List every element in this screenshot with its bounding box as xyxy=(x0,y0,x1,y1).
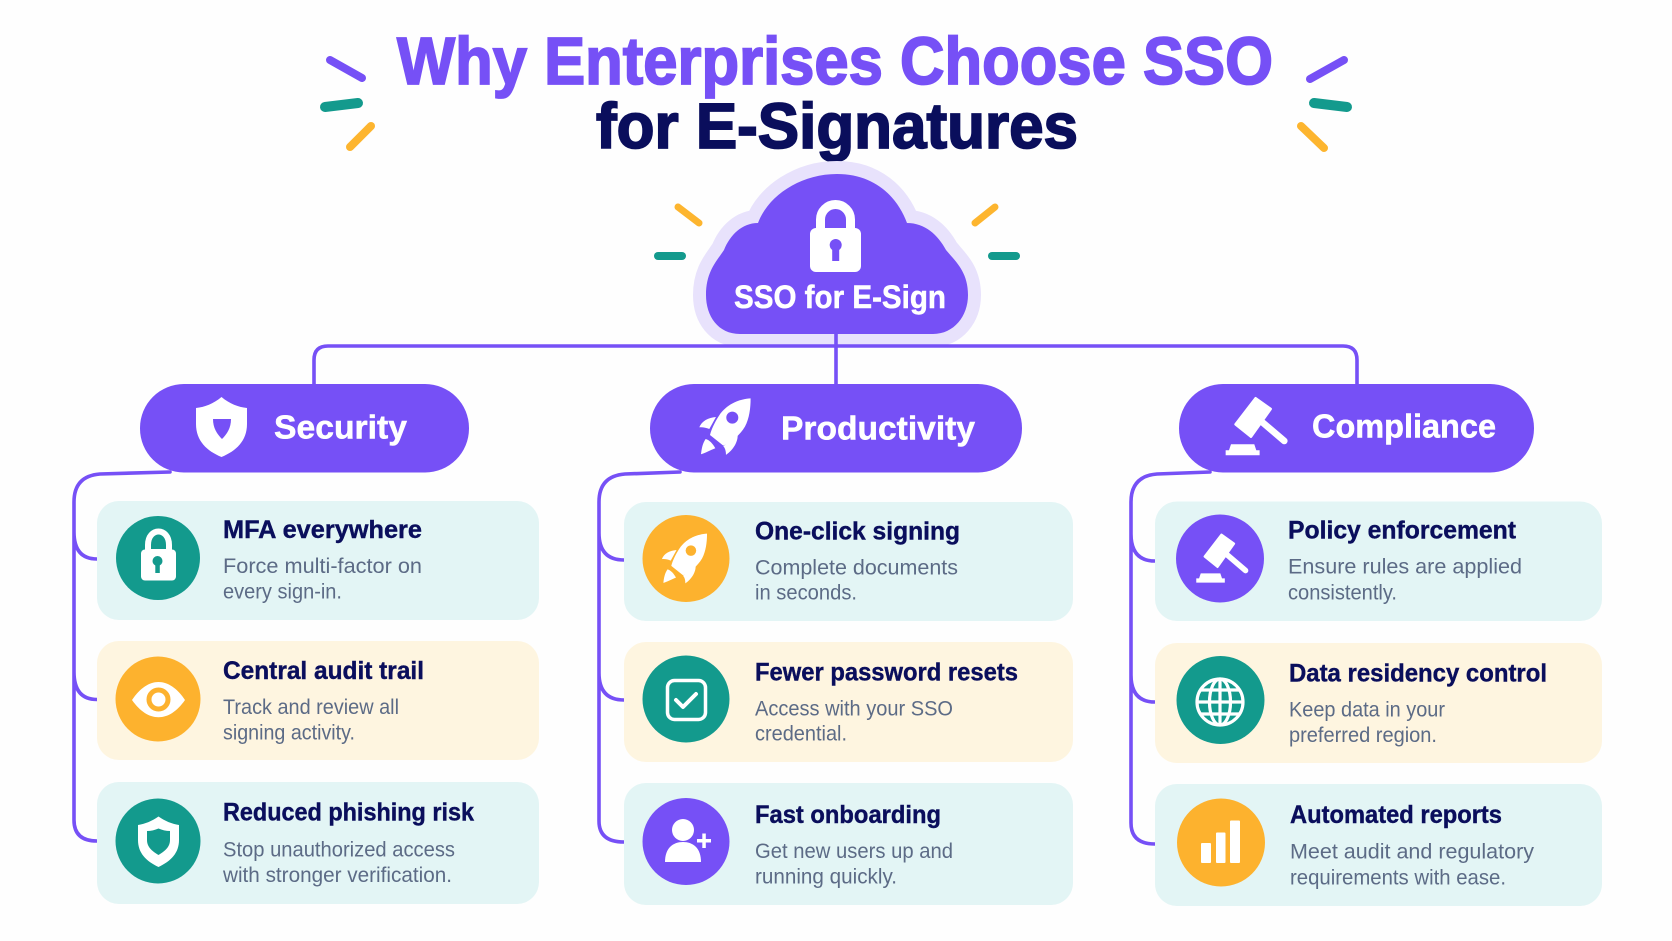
card: Fewer password resets: Fewer password resets xyxy=(755,658,1018,686)
card: Automated reports: Meet audit and regulatory xyxy=(1290,840,1535,864)
icon: rocket xyxy=(662,534,707,583)
card: MFA everywhere: Force multi-factor on xyxy=(223,555,422,578)
card: Data residency control: preferred region. xyxy=(1289,724,1437,747)
cloud halo xyxy=(706,174,968,334)
icon: shield xyxy=(196,397,247,457)
card: MFA everywhere: MFA everywhere xyxy=(223,516,422,544)
card: Data residency control xyxy=(1155,643,1602,763)
heading pill: Compliance xyxy=(1179,384,1534,472)
card: MFA everywhere xyxy=(97,501,539,620)
card: Policy enforcement xyxy=(1155,502,1602,621)
card: Data residency control: Keep data in your xyxy=(1289,698,1445,722)
card: Automated reports: requirements with ease. xyxy=(1290,866,1506,890)
icon: clipboard check xyxy=(668,680,706,720)
card: Fewer password resets: credential. xyxy=(755,722,847,746)
title: Why Enterprises Choose SSO xyxy=(397,24,1273,99)
icon: gavel xyxy=(1226,398,1284,455)
heading pill: Security xyxy=(140,384,469,472)
icon: padlock xyxy=(141,532,176,580)
cloud label: SSO for E-Sign xyxy=(734,279,946,315)
cloud accent dashes xyxy=(658,207,1016,256)
icon: globe xyxy=(1197,679,1243,725)
card: Reduced phishing risk: with stronger verification. xyxy=(222,864,452,887)
card: Central audit trail xyxy=(97,641,539,760)
icon: shield xyxy=(138,816,179,867)
panel: productivity column xyxy=(599,384,1073,905)
connector: cloud to categories xyxy=(314,334,1357,384)
panel: security column xyxy=(74,384,539,904)
card: Fewer password resets: Access with your SSO xyxy=(755,698,953,720)
heading pill: Productivity: Productivity xyxy=(781,410,976,446)
card: Policy enforcement: Ensure rules are applied xyxy=(1288,556,1522,578)
icon: gavel xyxy=(1196,535,1246,583)
card: Central audit trail: Track and review all xyxy=(223,696,399,719)
card: Central audit trail: Central audit trail xyxy=(223,657,424,685)
tree connector xyxy=(1131,472,1210,844)
cloud body xyxy=(706,174,968,334)
card: Reduced phishing risk: Reduced phishing risk xyxy=(223,798,474,826)
card: Fast onboarding: Get new users up and xyxy=(755,840,953,863)
card: Central audit trail: signing activity. xyxy=(223,722,355,744)
icon: padlock xyxy=(810,205,861,272)
card: Fast onboarding xyxy=(624,783,1073,905)
tree connector xyxy=(74,472,170,841)
card: Automated reports: Automated reports xyxy=(1290,801,1502,829)
central cloud node xyxy=(706,174,968,334)
card: Reduced phishing risk xyxy=(97,782,539,904)
card: One-click signing xyxy=(624,502,1073,621)
card: Fast onboarding: running quickly. xyxy=(755,866,897,888)
heading pill: Compliance: Compliance xyxy=(1312,408,1496,444)
card: Data residency control: Data residency control xyxy=(1289,660,1547,688)
title accent dashes left xyxy=(325,60,371,147)
card: Policy enforcement: Policy enforcement xyxy=(1288,516,1517,544)
heading pill: Productivity xyxy=(650,384,1022,472)
title xyxy=(397,24,1273,162)
card: One-click signing: in seconds. xyxy=(755,582,857,604)
card: Reduced phishing risk: Stop unauthorized access xyxy=(223,838,455,862)
card: Automated reports xyxy=(1155,784,1602,906)
card: Policy enforcement: consistently. xyxy=(1288,582,1397,604)
card: One-click signing: One-click signing xyxy=(755,518,960,546)
icon: rocket xyxy=(699,398,751,455)
card: Fast onboarding: Fast onboarding xyxy=(755,801,941,829)
card: MFA everywhere: every sign-in. xyxy=(223,580,342,604)
icon: bar chart xyxy=(1201,820,1240,863)
icon: add user xyxy=(665,819,711,862)
icon: eye xyxy=(132,682,185,717)
title accent dashes right xyxy=(1301,60,1347,148)
heading pill: Security: Security xyxy=(274,408,408,446)
card: Fewer password resets xyxy=(624,642,1073,762)
title: for E-Signatures xyxy=(596,90,1078,162)
tree connector xyxy=(599,472,680,842)
panel: compliance column xyxy=(1131,384,1602,906)
card: One-click signing: Complete documents xyxy=(755,556,958,580)
